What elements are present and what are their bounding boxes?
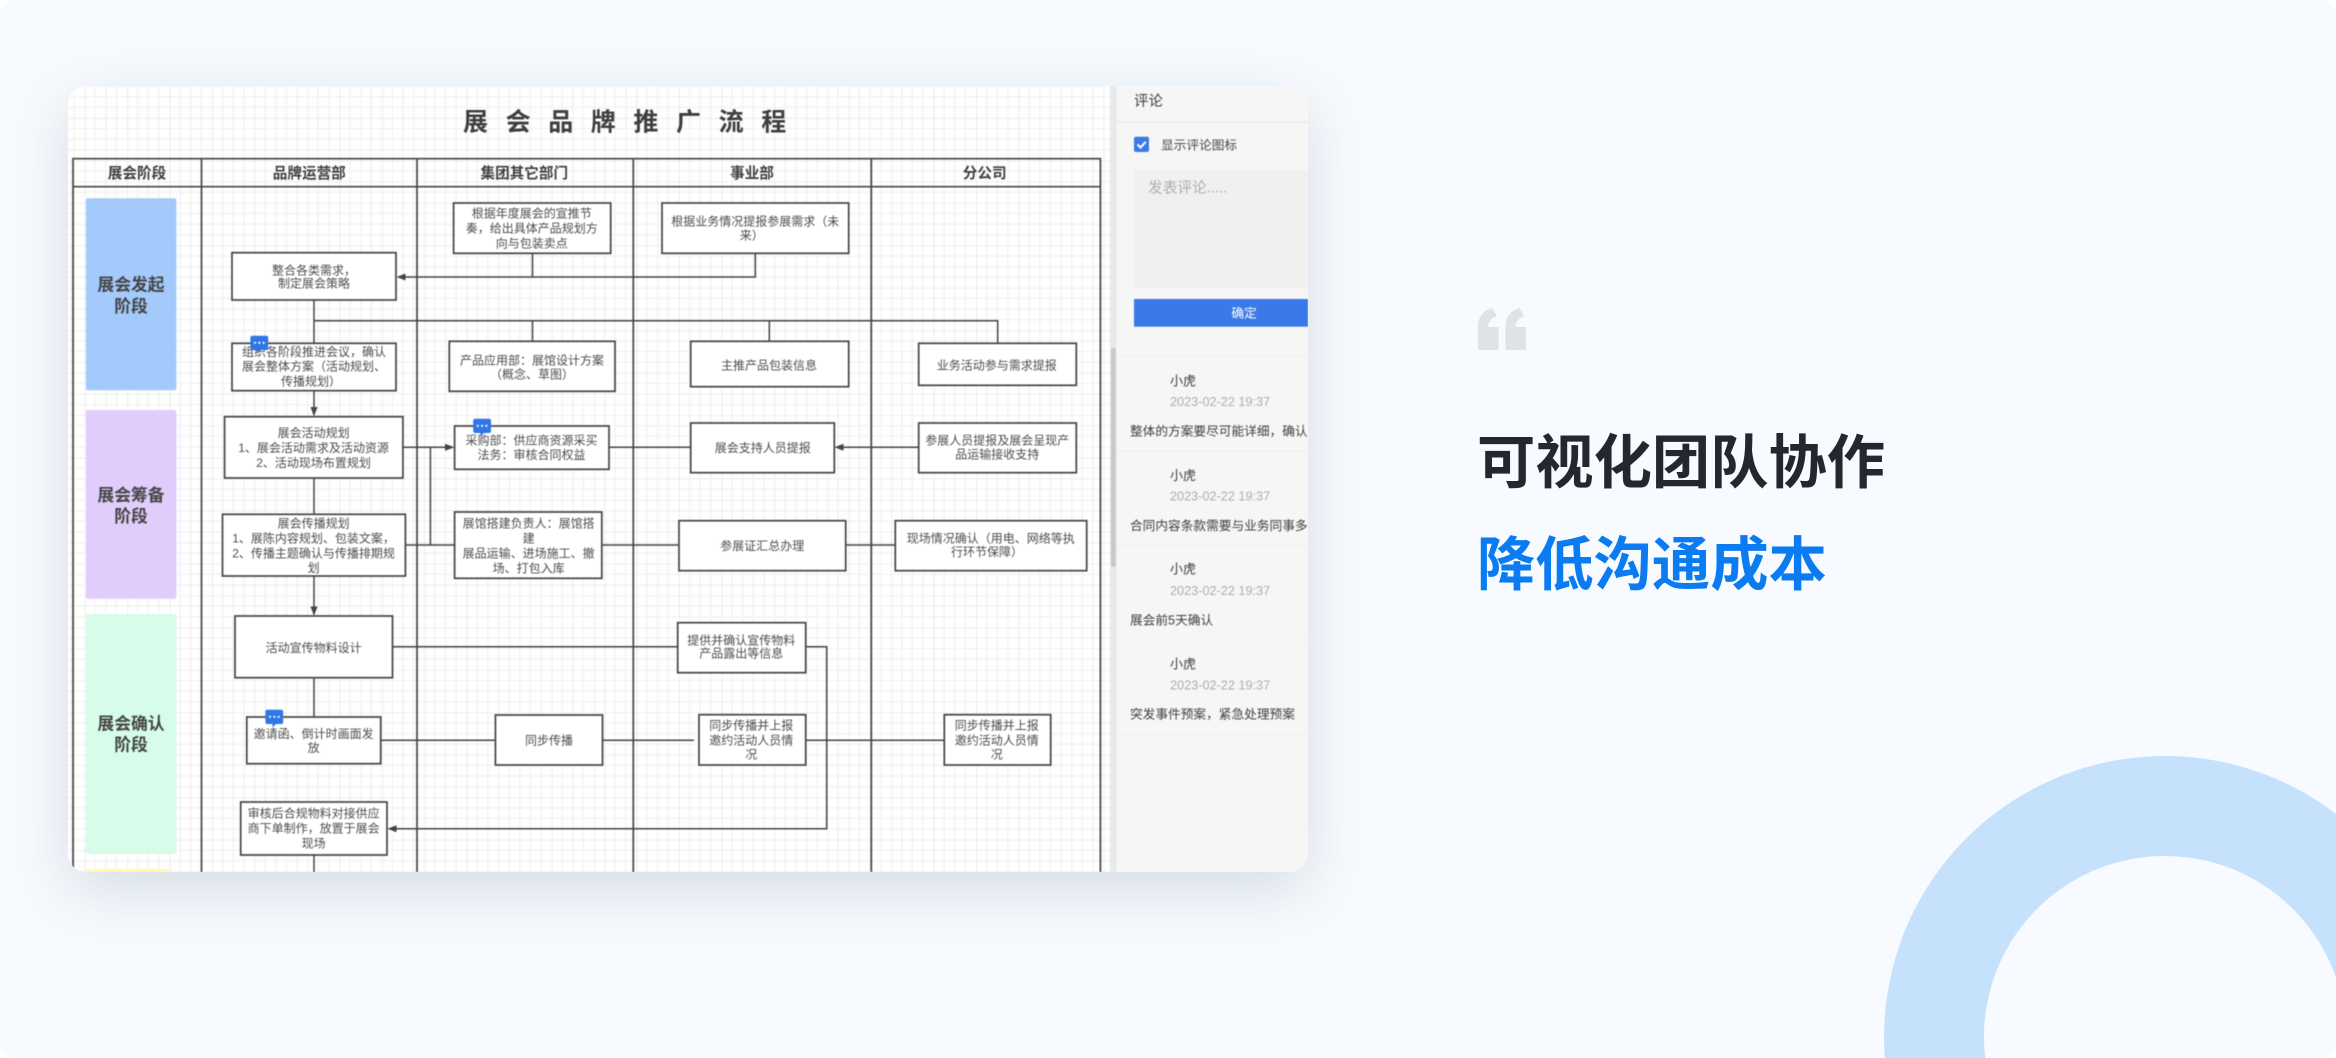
box: 展馆搭建负责人: 展品运输、进场施工、撤 xyxy=(463,545,595,560)
box: 整合各类需求: 制定展会策略 xyxy=(278,276,350,291)
submit button: 确定 xyxy=(1231,306,1257,320)
box: 展馆搭建负责人 xyxy=(455,512,602,578)
box: 同步传播并上报 (分公司): 邀约活动人员情 xyxy=(955,732,1039,747)
box: 业务活动参与需求提报: 业务活动参与需求提报 xyxy=(937,357,1057,372)
comment item 3: 展会前5天确认 xyxy=(1130,613,1213,628)
box: 组织各阶段推进会议: 展会整体方案（活动规划、 xyxy=(242,358,386,373)
heading: 降低沟通成本: 降低沟通成本 xyxy=(1477,533,1827,598)
comment item 4 xyxy=(1130,657,1295,722)
comment item 1: 2023-02-22 19:37 xyxy=(1170,395,1270,409)
phase: 展会筹备阶段 xyxy=(86,410,176,599)
box: 根据业务情况: 来） xyxy=(740,228,764,242)
box: 同步传播并上报 (分公司): 同步传播并上报 xyxy=(955,717,1039,732)
box: 现场情况确认: 行环节保障） xyxy=(951,544,1023,559)
comment item 2 xyxy=(1130,468,1308,533)
box: 根据年度展会: 向与包装卖点 xyxy=(496,235,568,250)
comment item 1: 整体的方案要尽可能详细，确认 xyxy=(1130,423,1308,438)
comment item 4: 2023-02-22 19:37 xyxy=(1170,678,1270,692)
lane header: 分公司: 分公司 xyxy=(963,165,1007,182)
box: 展会活动规划: 展会活动规划 xyxy=(278,425,350,440)
box: 同步传播 xyxy=(495,715,602,765)
box: 组织各阶段推进会议: 组织各阶段推进会议，确认 xyxy=(242,344,386,359)
box: 同步传播并上报 (事业部): 同步传播并上报 xyxy=(709,717,793,732)
phase: 展会发起阶段 xyxy=(86,198,176,390)
box: 同步传播: 同步传播 xyxy=(525,733,573,748)
box: 审核后合规物料: 现场 xyxy=(302,836,326,850)
box: 展馆搭建负责人: 展馆搭建负责人：展馆搭 xyxy=(463,515,595,530)
checkbox: 显示评论图标 xyxy=(1134,137,1237,153)
box: 展会活动规划: 2、活动现场布置规划 xyxy=(256,455,371,470)
comment item 1 xyxy=(1130,373,1308,438)
panel: flowchart and comments card xyxy=(68,86,1308,872)
box: 主推产品包装信息 xyxy=(691,341,849,387)
decorative ring xyxy=(1884,756,2336,1058)
comment item 1: 小虎 xyxy=(1170,373,1196,388)
box: 参展人员提报 xyxy=(919,423,1076,473)
box: 展会传播规划: 1、展陈内容规划、包装文案， xyxy=(232,531,395,546)
box: 根据年度展会: 奏，给出具体产品规划方 xyxy=(466,220,598,235)
submit button xyxy=(1134,299,1308,327)
box: 现场情况确认 xyxy=(895,521,1087,571)
box: 邀请函: 放 xyxy=(308,740,320,755)
comment item 3 xyxy=(1130,562,1270,628)
connector lines xyxy=(314,253,998,872)
icon: comment bubble 3 xyxy=(265,710,283,728)
box: 审核后合规物料: 审核后合规物料对接供应 xyxy=(248,806,380,821)
box: 整合各类需求: 整合各类需求， xyxy=(272,262,356,277)
phase: 展会确认阶段: 阶段 xyxy=(114,734,148,754)
comment item 2: 合同内容条款需要与业务同事多 xyxy=(1130,518,1308,533)
box: 展会支持人员提报 xyxy=(691,423,834,473)
box: 展会传播规划: 2、传播主题确认与传播排期规 xyxy=(232,546,395,561)
box: 展会支持人员提报: 展会支持人员提报 xyxy=(715,440,811,455)
box: 同步传播并上报 (事业部): 况 xyxy=(745,748,757,762)
box: 展会活动规划 xyxy=(225,417,403,478)
box: 参展人员提报: 参展人员提报及展会呈现产 xyxy=(925,433,1069,448)
box: 提供并确认宣传物料 xyxy=(678,623,806,673)
box: 提供并确认宣传物料: 提供并确认宣传物料 xyxy=(687,632,795,647)
box: 参展人员提报: 品运输接收支持 xyxy=(955,447,1039,462)
lane header: 展会阶段: 展会阶段 xyxy=(108,164,167,182)
box: 同步传播并上报 (事业部): 邀约活动人员情 xyxy=(709,732,793,747)
box: 展馆搭建负责人: 建 xyxy=(523,531,535,545)
box: 同步传播并上报 (事业部) xyxy=(699,715,806,765)
box: 整合各类需求 xyxy=(232,253,396,300)
phase: 展会发起阶段: 阶段 xyxy=(114,296,148,316)
box: 根据业务情况: 根据业务情况提报参展需求（未 xyxy=(671,213,839,228)
panel: comments sidebar xyxy=(1117,86,1308,872)
box: 同步传播并上报 (分公司): 况 xyxy=(991,748,1003,762)
box: 组织各阶段推进会议 xyxy=(232,343,396,391)
box: 审核后合规物料 xyxy=(241,802,387,855)
box: 业务活动参与需求提报 xyxy=(919,343,1076,385)
comment item 2: 2023-02-22 19:37 xyxy=(1170,490,1270,504)
box: 展会传播规划 xyxy=(222,514,405,576)
box: 主推产品包装信息: 主推产品包装信息 xyxy=(721,357,817,372)
scrollbar xyxy=(1110,86,1117,872)
box: 参展证汇总办理: 参展证汇总办理 xyxy=(720,538,804,553)
comment item 2: 小虎 xyxy=(1170,468,1196,483)
swimlane table xyxy=(73,159,1100,872)
box: 现场情况确认: 现场情况确认（用电、网络等执 xyxy=(907,531,1075,546)
phase: 展会发起阶段: 展会发起 xyxy=(97,274,165,294)
box: 根据业务情况 xyxy=(662,203,849,253)
comment item 3: 2023-02-22 19:37 xyxy=(1170,584,1270,598)
comment input xyxy=(1134,170,1308,288)
box: 产品应用部 xyxy=(449,341,615,391)
box: 采购部: 法务：审核合同权益 xyxy=(477,447,586,462)
box: 产品应用部: （概念、草图） xyxy=(490,366,574,381)
flowchart title: 展会品牌推广流程 xyxy=(463,108,804,136)
box: 同步传播并上报 (分公司) xyxy=(944,715,1051,765)
lane header: 品牌运营部: 品牌运营部 xyxy=(273,164,346,182)
lane header: 集团其它部门: 集团其它部门 xyxy=(481,164,568,182)
box: 根据年度展会 xyxy=(454,203,611,253)
box: 根据年度展会: 根据年度展会的宣推节 xyxy=(472,206,592,221)
box: 采购部 xyxy=(455,426,609,469)
phase: 展会确认阶段: 展会确认 xyxy=(97,713,165,733)
box: 邀请函: 邀请函、倒计时画面发 xyxy=(254,726,374,741)
comment item 4: 突发事件预案，紧急处理预案 xyxy=(1130,707,1295,722)
comments heading: 评论 xyxy=(1134,93,1163,110)
box: 活动宣传物料设计 xyxy=(235,616,392,678)
icon: comment bubble 2 xyxy=(473,419,491,436)
box: 展会传播规划: 展会传播规划 xyxy=(278,516,350,531)
box: 产品应用部: 产品应用部：展馆设计方案 xyxy=(460,352,604,367)
box: 参展证汇总办理 xyxy=(679,521,846,571)
box: 审核后合规物料: 商下单制作，放置于展会 xyxy=(248,820,380,835)
box: 邀请函 xyxy=(247,717,381,764)
box: 组织各阶段推进会议: 传播规划） xyxy=(281,373,341,388)
box: 提供并确认宣传物料: 产品露出等信息 xyxy=(699,646,783,661)
phase: 展会筹备阶段: 阶段 xyxy=(114,506,148,526)
phase: next phase (clipped) xyxy=(86,869,169,872)
box: 活动宣传物料设计: 活动宣传物料设计 xyxy=(266,640,362,655)
lane header: 事业部: 事业部 xyxy=(730,164,774,182)
comment item 3: 小虎 xyxy=(1170,562,1196,577)
icon: comment bubble 1 xyxy=(250,336,268,354)
icon: quotation mark xyxy=(1478,308,1526,350)
box: 展会传播规划: 划 xyxy=(308,561,320,575)
phase: 展会确认阶段 xyxy=(86,614,176,854)
comment item 4: 小虎 xyxy=(1170,657,1196,672)
heading: 可视化团队协作: 可视化团队协作 xyxy=(1477,431,1885,496)
comment input: 发表评论..... xyxy=(1148,179,1227,196)
phase: 展会筹备阶段: 展会筹备 xyxy=(97,485,165,505)
checkbox: 显示评论图标: 显示评论图标 xyxy=(1161,139,1237,153)
arrowheads xyxy=(310,274,844,832)
box: 展会活动规划: 1、展会活动需求及活动资源 xyxy=(238,441,389,455)
box: 展馆搭建负责人: 场、打包入库 xyxy=(493,560,565,575)
box: 采购部: 采购部：供应商资源采买 xyxy=(465,432,598,447)
